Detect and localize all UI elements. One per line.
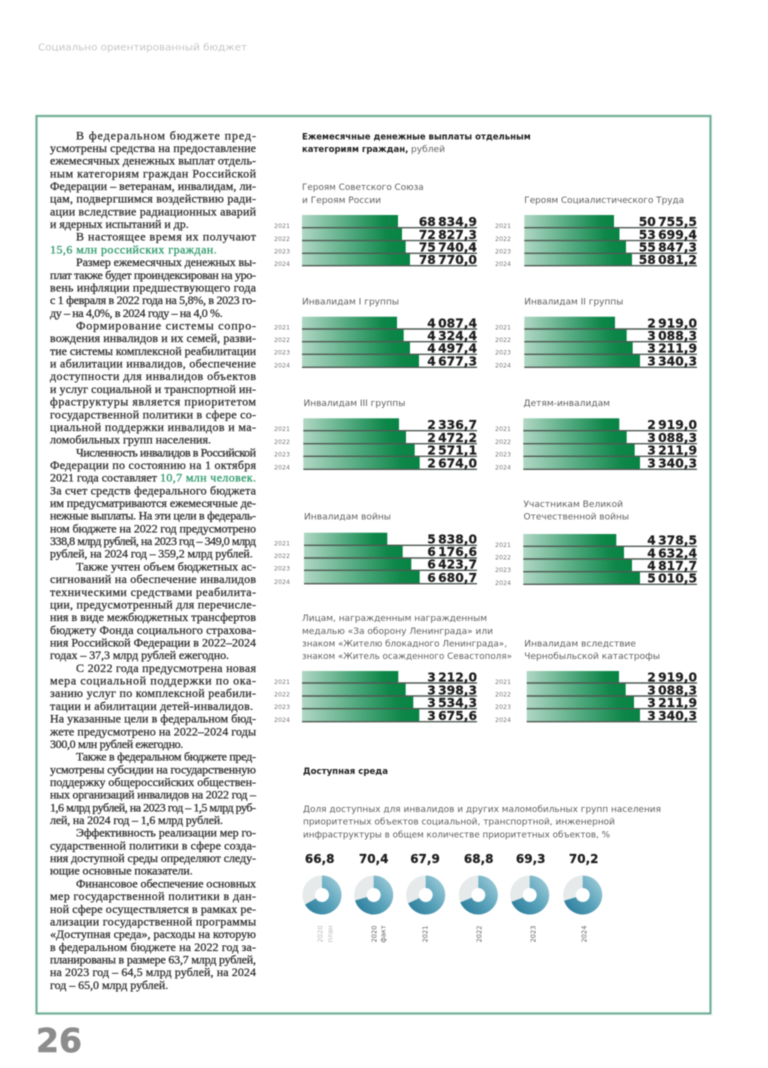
chart: Disabled children: 2022 bbox=[495, 439, 511, 446]
chart: Disability group II: 2021 bbox=[495, 324, 511, 332]
chart: Disability group II: 3 211,9 bbox=[647, 342, 697, 356]
chart: Disabled children: 2021 bbox=[495, 426, 511, 433]
chart: War invalids: 2024 bbox=[274, 579, 290, 586]
chart: Disability group I: 4 497,4 bbox=[427, 342, 477, 356]
donut: 2021: 2021 bbox=[422, 926, 430, 942]
chart: Heroes of USSR and Russia: 2023 bbox=[274, 248, 290, 256]
chart: Heroes of USSR and Russia: 2022 bbox=[274, 236, 290, 243]
donut: 2020 actual: факт bbox=[380, 925, 388, 943]
chart: Disability group II: Инвалидам II группы bbox=[524, 296, 623, 306]
donut: 2020 actual bbox=[355, 852, 393, 943]
chart: Disabled children: Детям-инвалидам bbox=[524, 398, 610, 408]
left text column: цам, подвергшимся воздействию ради- bbox=[50, 192, 256, 206]
left text column: ной сфере осуществляется в рамках ре- bbox=[50, 902, 256, 916]
chart: Disability group II bbox=[495, 296, 697, 370]
chart: War invalids: 2021 bbox=[274, 540, 290, 548]
left text column: год – 65,0 млрд рублей. bbox=[50, 978, 168, 992]
chart: Disability group III: 2024 bbox=[274, 464, 290, 472]
left text column: 10,7 млн человек. bbox=[160, 471, 256, 485]
chart: Leningrad and Sevastopol award holders bbox=[274, 613, 512, 724]
left text column: ющие основные показатели. bbox=[50, 864, 193, 878]
left text column: «Доступная среда», расходы на которую bbox=[50, 927, 256, 941]
heading: monthly payments: категориям граждан, bbox=[302, 145, 408, 155]
left text column: рублей, на 2024 год – 359,2 млрд рублей. bbox=[50, 547, 253, 561]
chart: Disability group II: 2023 bbox=[495, 350, 511, 357]
left text column: на 2023 год – 64,5 млрд рублей, на 2024 bbox=[50, 965, 256, 979]
chart: Disability group III: 2023 bbox=[274, 452, 290, 459]
chart: Disability group III: 2 571,1 bbox=[427, 444, 477, 458]
left text column: Численность инвалидов в Российской bbox=[76, 445, 257, 459]
donut: 2024: 2024 bbox=[580, 926, 588, 942]
left text column: лей, на 2024 год – 1,6 млрд рублей. bbox=[50, 813, 223, 827]
chart: Disability group II: 2022 bbox=[495, 337, 511, 344]
chart: Disabled children: 3 088,3 bbox=[647, 431, 697, 445]
chart: Disabled children: 2024 bbox=[495, 464, 511, 472]
chart: War invalids: 6 680,7 bbox=[427, 571, 477, 585]
left text column: 1,6 млрд рублей, на 2023 год – 1,5 млрд руб- bbox=[50, 800, 256, 814]
left text column: мера социальной поддержки по ока- bbox=[50, 674, 256, 688]
left text column: Формирование системы сопро- bbox=[76, 318, 256, 332]
left text column: плат также будет проиндексирован на уро- bbox=[50, 268, 256, 282]
chart: WWII veterans: 2024 bbox=[495, 580, 511, 587]
donut: 2020 plan: 66,8 bbox=[305, 852, 335, 866]
left text column: в федеральном бюджете на 2022 год за- bbox=[50, 940, 256, 954]
chart: Chernobyl disaster invalids: 3 340,3 bbox=[647, 709, 697, 723]
left text column: ции, предусмотренный для перечисле- bbox=[50, 598, 256, 612]
page number: 26 bbox=[36, 1021, 82, 1060]
donut: 2020 actual: 2020 bbox=[370, 926, 378, 942]
chart: WWII veterans bbox=[495, 499, 697, 587]
left text column: ным категориям граждан Российской bbox=[50, 166, 257, 180]
left text column: циальной поддержки инвалидов и ма- bbox=[50, 420, 256, 434]
chart: Heroes of USSR and Russia: и Героям России bbox=[302, 195, 381, 205]
chart: Chernobyl disaster invalids: 2022 bbox=[495, 692, 511, 698]
chart: Leningrad and Sevastopol award holders: знаком «Жителю блокадного Ленинграда», bbox=[302, 638, 507, 648]
left text column: сигнований на обеспечение инвалидов bbox=[50, 572, 256, 586]
panel frame bbox=[36, 116, 710, 1014]
heading: accessible environment: Доступная среда bbox=[303, 767, 388, 777]
chart: Disability group I: 4 087,4 bbox=[427, 316, 477, 330]
chart: WWII veterans: Отечественной войны bbox=[524, 512, 629, 522]
chart: Chernobyl disaster invalids: 3 088,3 bbox=[647, 683, 697, 697]
chart: Disability group II: 2 919,0 bbox=[647, 316, 697, 330]
chart: Heroes of Socialist Labour: 2024 bbox=[495, 261, 511, 268]
chart: Leningrad and Sevastopol award holders: знаком «Житель осажденного Севастополя» bbox=[302, 651, 512, 661]
chart: Heroes of Socialist Labour: 2022 bbox=[495, 236, 511, 243]
left text column: жете предусмотрено на 2022–2024 годы bbox=[49, 724, 256, 738]
chart: War invalids: 5 838,0 bbox=[427, 532, 477, 546]
left text column: Также учтен объем бюджетных ас- bbox=[76, 559, 256, 573]
left text column: За счет средств федерального бюджета bbox=[50, 483, 257, 497]
chart: War invalids: Инвалидам войны bbox=[304, 512, 391, 522]
chart: Disability group I: Инвалидам I группы bbox=[302, 296, 399, 306]
donut: 2020 plan: 2020 bbox=[316, 926, 324, 942]
chart: Heroes of Socialist Labour: 55 847,3 bbox=[639, 241, 697, 255]
donut: 2021 bbox=[408, 852, 445, 942]
left text column: 2021 года составляет bbox=[50, 471, 158, 485]
donut: 2024: 70,2 bbox=[569, 852, 599, 866]
left text column: Федерации по состоянию на 1 октября bbox=[50, 458, 256, 472]
page running header: Социально ориентированный бюджет bbox=[38, 43, 248, 54]
left text column: и услуг социальной и транспортной ин- bbox=[50, 382, 256, 396]
left text column: доступности для инвалидов объектов bbox=[50, 369, 256, 383]
left text column: ния Российской Федерации в 2022–2024 bbox=[50, 636, 256, 650]
chart: Disability group III: 2 674,0 bbox=[427, 456, 477, 470]
chart: Heroes of USSR and Russia: 2021 bbox=[274, 223, 290, 230]
donut: 2023: 69,3 bbox=[516, 852, 546, 866]
chart: Chernobyl disaster invalids bbox=[495, 638, 697, 724]
chart: Chernobyl disaster invalids: 3 211,9 bbox=[647, 696, 697, 710]
chart: Heroes of USSR and Russia: 72 827,3 bbox=[419, 228, 477, 242]
chart: Disabled children: 3 340,3 bbox=[647, 456, 697, 470]
chart: War invalids bbox=[274, 512, 477, 586]
chart: Heroes of Socialist Labour: 53 699,4 bbox=[639, 228, 697, 242]
chart: WWII veterans: 4 817,7 bbox=[647, 559, 697, 573]
heading: monthly payments: Ежемесячные денежные выплаты отдельным bbox=[302, 132, 531, 142]
heading: monthly payments: рублей bbox=[411, 144, 445, 154]
donut: 2022: 2022 bbox=[476, 926, 484, 942]
chart: Leningrad and Sevastopol award holders: 3 534,3 bbox=[427, 696, 477, 710]
left text column: ализации государственной программы bbox=[50, 914, 256, 928]
left text column: планированы в размере 63,7 млрд рублей, bbox=[50, 952, 256, 966]
left text column: Финансовое обеспечение основных bbox=[76, 876, 256, 890]
chart: WWII veterans: 2021 bbox=[495, 542, 511, 549]
chart: Disability group II: 3 088,3 bbox=[647, 329, 697, 343]
left text column: Также в федеральном бюджете пред- bbox=[76, 750, 256, 764]
chart: Chernobyl disaster invalids: Чернобыльской катастрофы bbox=[524, 651, 660, 661]
left text column: тации и абилитации детей-инвалидов. bbox=[50, 699, 253, 713]
left text column: сударственной политики в сфере созда- bbox=[50, 838, 256, 852]
left text column: годах – 37,3 млрд рублей ежегодно. bbox=[50, 648, 229, 662]
chart: Heroes of USSR and Russia: 2024 bbox=[274, 261, 290, 268]
chart: Disability group III: 2022 bbox=[274, 439, 290, 446]
donut: 2022 bbox=[460, 852, 498, 942]
left text column: вождения инвалидов и их семей, разви- bbox=[50, 331, 256, 345]
chart: Heroes of USSR and Russia: Героям Советского Союза bbox=[302, 182, 424, 192]
description of accessibility indicator: приоритетных объектов социальной, транспортной, инженерной bbox=[303, 817, 615, 827]
chart: Heroes of Socialist Labour: 50 755,5 bbox=[639, 215, 697, 229]
chart: Heroes of USSR and Russia bbox=[274, 182, 477, 268]
chart: Chernobyl disaster invalids: 2024 bbox=[495, 717, 511, 724]
chart: Heroes of USSR and Russia: 68 834,9 bbox=[419, 215, 477, 229]
left text column: ния доступной среды определяют следу- bbox=[50, 851, 256, 865]
chart: Disability group I: 4 677,3 bbox=[427, 354, 477, 368]
chart: WWII veterans: 2022 bbox=[495, 554, 511, 562]
chart: Disability group II: 3 340,3 bbox=[647, 354, 697, 368]
left text column: Федерации – ветеранам, инвалидам, ли- bbox=[50, 179, 256, 193]
chart: War invalids: 6 176,6 bbox=[427, 545, 477, 559]
left text column: ломобильных групп населения. bbox=[50, 433, 211, 447]
chart: Leningrad and Sevastopol award holders: 2024 bbox=[274, 717, 290, 724]
left text column: усмотрены средства на предоставление bbox=[50, 141, 256, 155]
left text column: Эффективность реализации мер го- bbox=[76, 826, 256, 840]
donut: 2022: 68,8 bbox=[464, 852, 494, 866]
left text column: с 1 февраля в 2022 года на 5,8%, в 2023 го- bbox=[50, 293, 256, 307]
chart: Disability group I: 2021 bbox=[274, 324, 290, 332]
left text column: и абилитации инвалидов, обеспечение bbox=[50, 356, 256, 370]
chart: Heroes of Socialist Labour: 2021 bbox=[495, 223, 511, 230]
chart: Leningrad and Sevastopol award holders: 2021 bbox=[274, 679, 290, 686]
chart: Chernobyl disaster invalids: Инвалидам вследствие bbox=[524, 638, 636, 648]
chart: Disability group III: Инвалидам III группы bbox=[304, 398, 405, 408]
chart: Heroes of Socialist Labour: Героям Социалистического Труда bbox=[524, 195, 684, 205]
left text column: ации вследствие радиационных аварий bbox=[50, 204, 257, 218]
left text column: 300,0 млн рублей ежегодно. bbox=[50, 737, 183, 751]
left text column: им предусматриваются ежемесячные де- bbox=[50, 496, 256, 510]
donut: 2020 plan bbox=[305, 852, 342, 942]
chart: Disability group III: 2 336,7 bbox=[427, 418, 477, 432]
donut: 2020 actual: 70,4 bbox=[359, 852, 389, 866]
chart: Leningrad and Sevastopol award holders: 3 212,0 bbox=[427, 670, 477, 684]
chart: War invalids: 6 423,7 bbox=[427, 558, 477, 572]
chart: WWII veterans: Участникам Великой bbox=[524, 499, 623, 509]
chart: Leningrad and Sevastopol award holders: 2022 bbox=[274, 692, 290, 698]
donut: 2023: 2023 bbox=[530, 926, 538, 942]
chart: WWII veterans: 2023 bbox=[495, 567, 511, 574]
donut: 2021: 67,9 bbox=[410, 852, 440, 866]
left text column: бюджету Фонда социального страхова- bbox=[50, 623, 256, 637]
chart: Disability group I: 2022 bbox=[274, 337, 290, 344]
left text column: нежные выплаты. На эти цели в федераль- bbox=[50, 509, 256, 523]
donut: 2024 bbox=[564, 852, 602, 942]
chart: Disability group III bbox=[274, 398, 477, 472]
chart: Disability group I: 2023 bbox=[274, 350, 290, 357]
left text column: и ядерных испытаний и др. bbox=[50, 217, 189, 231]
chart: Disabled children bbox=[495, 398, 697, 472]
left text column: Размер ежемесячных денежных вы- bbox=[76, 255, 256, 269]
chart: Leningrad and Sevastopol award holders: 3 675,6 bbox=[427, 709, 477, 723]
chart: Heroes of Socialist Labour bbox=[495, 195, 697, 268]
chart: Heroes of Socialist Labour: 2023 bbox=[495, 248, 511, 256]
chart: War invalids: 2023 bbox=[274, 566, 290, 573]
chart: Heroes of Socialist Labour: 58 081,2 bbox=[639, 253, 697, 267]
left text column: С 2022 года предусмотрена новая bbox=[76, 661, 256, 675]
chart: WWII veterans: 4 378,5 bbox=[647, 534, 697, 548]
left text column: вень инфляции предшествующего года bbox=[50, 280, 257, 294]
left text column: ежемесячных денежных выплат отдель- bbox=[50, 154, 256, 168]
left text column: ния в виде межбюджетных трансфертов bbox=[50, 610, 256, 624]
left text column: 338,8 млрд рублей, на 2023 год – 349,0 млрд bbox=[50, 534, 256, 548]
donut: 2020 plan: план bbox=[326, 926, 334, 942]
left text column: мер государственной политики в дан- bbox=[50, 889, 256, 903]
left text column: усмотрены субсидии на государственную bbox=[50, 762, 256, 776]
left text column: фраструктуры является приоритетом bbox=[50, 395, 256, 409]
chart: Disabled children: 2 919,0 bbox=[647, 418, 697, 432]
left text column: техническими средствами реабилита- bbox=[50, 585, 256, 599]
left text column: поддержку общероссийских обществен- bbox=[50, 775, 256, 789]
left text column: В федеральном бюджете пред- bbox=[76, 128, 256, 142]
chart: Heroes of USSR and Russia: 75 740,4 bbox=[419, 241, 477, 255]
chart: Chernobyl disaster invalids: 2023 bbox=[495, 704, 511, 711]
left text column: 15,6 млн российских граждан. bbox=[50, 242, 217, 256]
chart: Leningrad and Sevastopol award holders: 3 398,3 bbox=[427, 683, 477, 697]
heading: monthly payments bbox=[302, 132, 531, 155]
left text column: государственной политики в сфере со- bbox=[50, 407, 256, 421]
left text column: занию услуг по комплексной реабили- bbox=[50, 686, 256, 700]
description of accessibility indicator: Доля доступных для инвалидов и других маломобильных групп населения bbox=[303, 804, 661, 814]
chart: Disabled children: 3 211,9 bbox=[647, 444, 697, 458]
left text column: ду – на 4,0%, в 2024 году – на 4,0 %. bbox=[50, 306, 223, 320]
chart: Disabled children: 2023 bbox=[495, 452, 511, 459]
chart: WWII veterans: 4 632,4 bbox=[647, 546, 697, 560]
chart: WWII veterans: 5 010,5 bbox=[647, 572, 697, 586]
left text column: ных организаций инвалидов на 2022 год – bbox=[50, 788, 257, 802]
chart: Heroes of USSR and Russia: 78 770,0 bbox=[419, 253, 477, 267]
left text column: На указанные цели в федеральном бюд- bbox=[50, 712, 256, 726]
left text column: тие системы комплексной реабилитации bbox=[50, 344, 257, 358]
description of accessibility indicator bbox=[303, 804, 661, 839]
chart: Disability group I bbox=[274, 296, 477, 370]
chart: Disability group I: 2024 bbox=[274, 362, 290, 370]
left text column bbox=[49, 128, 257, 992]
description of accessibility indicator: инфраструктуры в общем количестве приоритетных объектов, % bbox=[303, 829, 610, 839]
chart: Disability group III: 2021 bbox=[274, 426, 290, 433]
chart: Disability group I: 4 324,4 bbox=[427, 329, 477, 343]
chart: Leningrad and Sevastopol award holders: 2023 bbox=[274, 704, 290, 711]
chart: Disability group II: 2024 bbox=[495, 362, 511, 370]
chart: Chernobyl disaster invalids: 2 919,0 bbox=[647, 670, 697, 684]
chart: Leningrad and Sevastopol award holders: медалью «За оборону Ленинграда» или bbox=[302, 626, 493, 636]
chart: Disability group III: 2 472,2 bbox=[427, 431, 477, 445]
left text column: В настоящее время их получают bbox=[76, 230, 257, 244]
chart: Chernobyl disaster invalids: 2021 bbox=[495, 679, 511, 686]
left text column: ном бюджете на 2022 год предусмотрено bbox=[50, 521, 256, 535]
donut: 2023 bbox=[511, 852, 549, 942]
chart: War invalids: 2022 bbox=[274, 553, 290, 560]
chart: Leningrad and Sevastopol award holders: Лицам, награжденным награжденным bbox=[302, 613, 487, 623]
